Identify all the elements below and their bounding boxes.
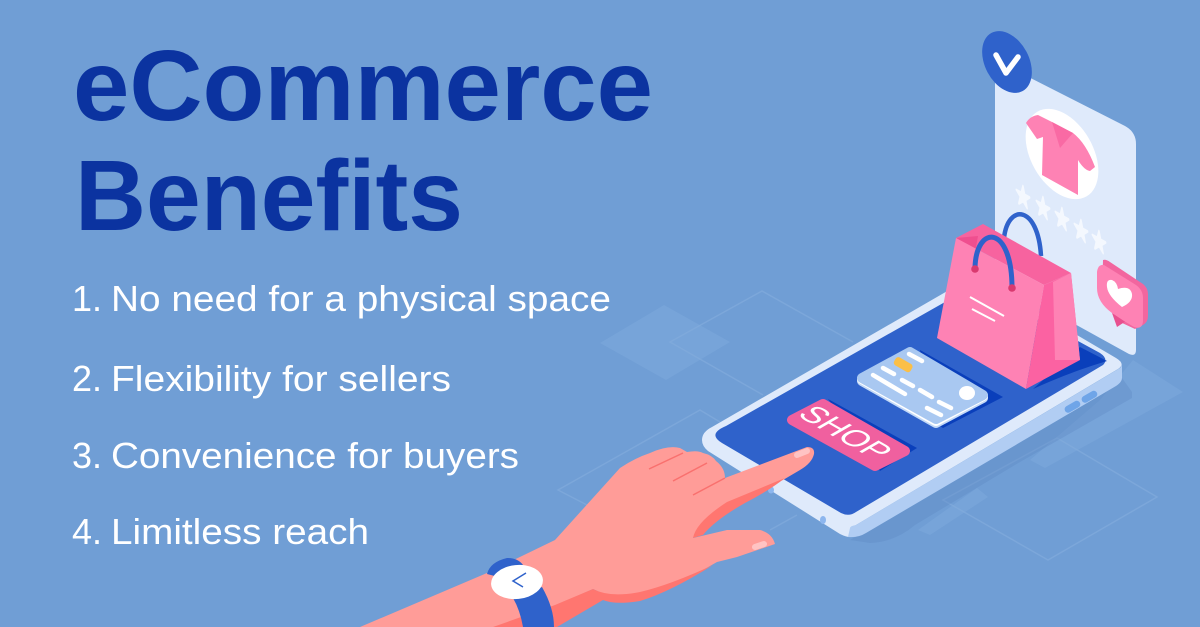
- title: [73, 30, 653, 252]
- benefit 4: 4.: [72, 511, 102, 552]
- phone: [702, 275, 1132, 543]
- benefit 1: No need for a physical space: [111, 278, 611, 319]
- icon: wristwatch: [487, 558, 554, 627]
- hand pointing: [360, 447, 814, 627]
- benefit 1: 1.: [72, 278, 102, 319]
- title: eCommerce: [73, 30, 653, 142]
- title: Benefits: [75, 140, 463, 252]
- product review panel: [972, 23, 1136, 355]
- benefit 2: Flexibility for sellers: [111, 358, 451, 399]
- shop button: SHOP: [790, 400, 901, 465]
- icon: check badge: [972, 23, 1042, 101]
- benefit 2: 2.: [72, 358, 102, 399]
- benefit 3: 3.: [72, 435, 102, 476]
- star rating: [1016, 182, 1106, 255]
- benefit 3: Convenience for buyers: [111, 435, 519, 476]
- icon: heart speech bubble: [1097, 260, 1148, 329]
- credit card: [862, 350, 1003, 428]
- benefit 4: Limitless reach: [111, 511, 369, 552]
- benefits list: [72, 278, 611, 552]
- icon: shirt: [1011, 96, 1113, 212]
- shopping bag: [937, 214, 1107, 389]
